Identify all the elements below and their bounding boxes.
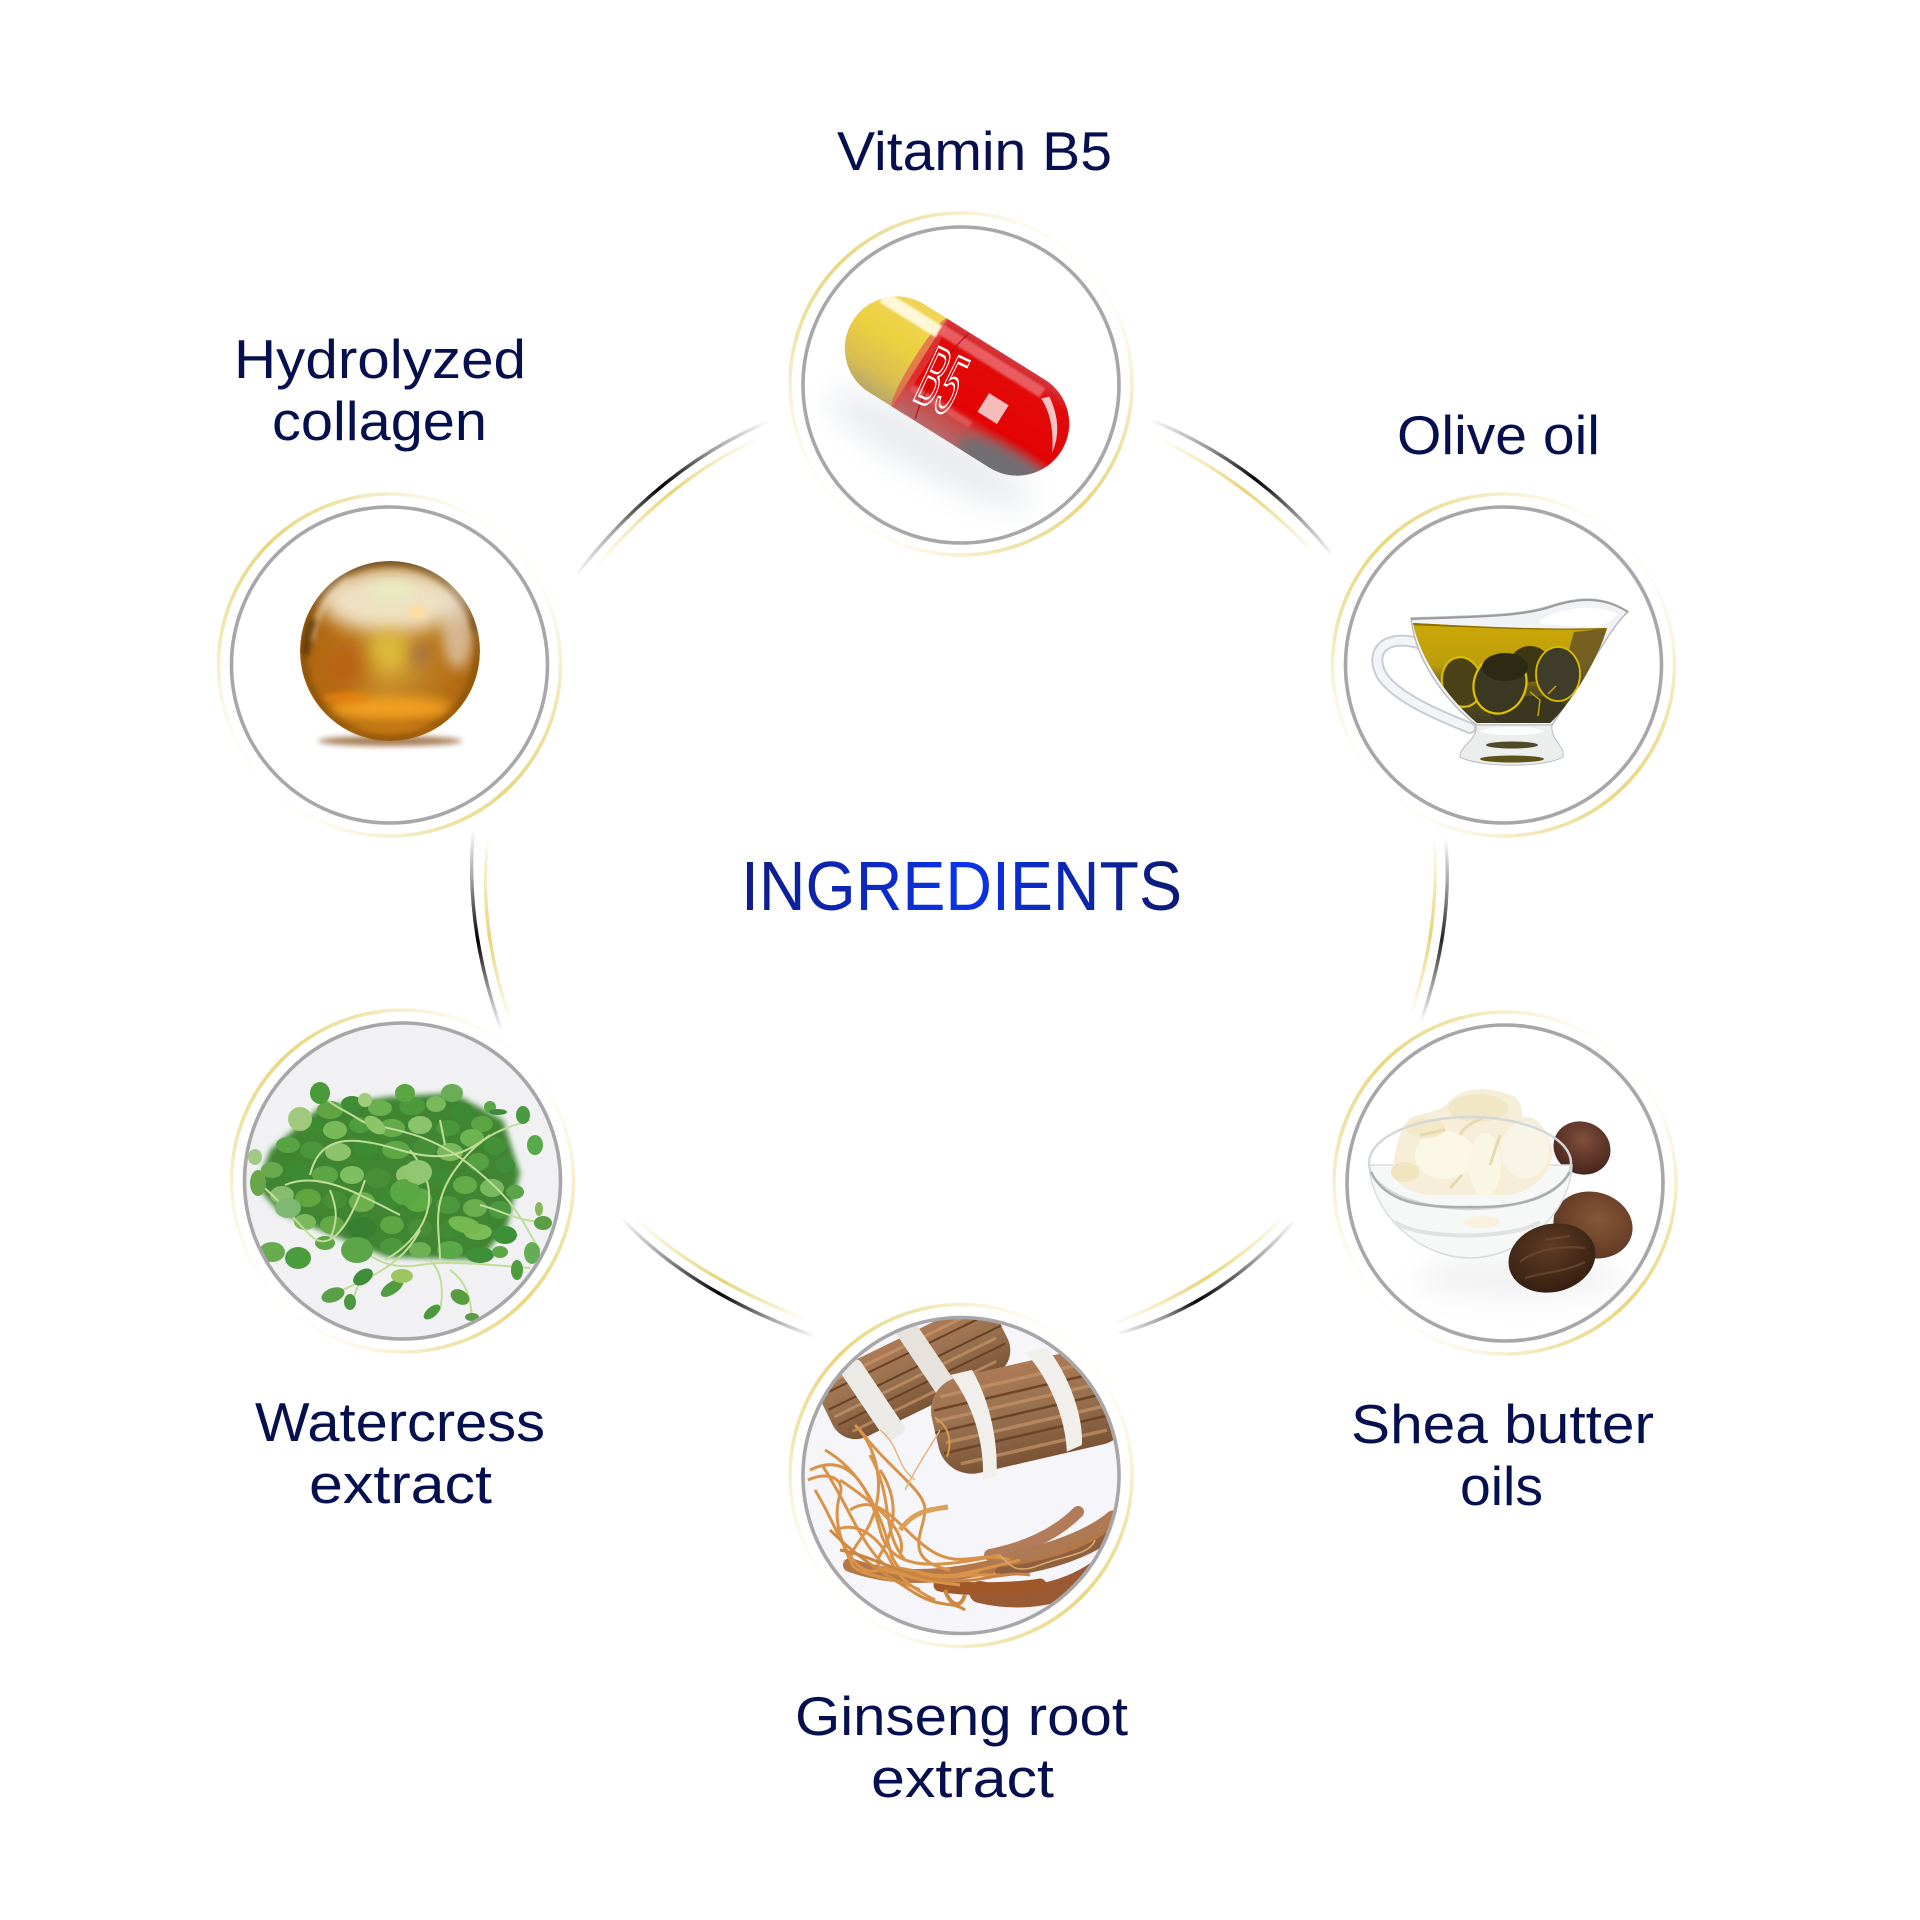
- icon: glass handle: [1377, 641, 1470, 728]
- icon: capsule: [844, 296, 1070, 476]
- bundle top left: [822, 1319, 1010, 1441]
- watercress background: [246, 1024, 560, 1338]
- outer and highlight leaves: [248, 1082, 552, 1322]
- label: Ginseng root extract: Ginseng root: [795, 1685, 1128, 1747]
- central heading: INGREDIENTS: INGREDIENTS: [741, 847, 1182, 925]
- connecting arc: left: [472, 815, 514, 1040]
- ground shadow: [1415, 1260, 1625, 1296]
- label: Shea butter oils: [1351, 1393, 1654, 1517]
- label: Shea butter oils: oils: [1460, 1455, 1543, 1517]
- icon: right nut: [1546, 1183, 1640, 1267]
- ingredient circle: Hydrolyzed collagen sphere: [218, 494, 560, 836]
- label: Watercress extract: Watercress: [255, 1391, 545, 1453]
- label: Hydrolyzed collagen: Hydrolyzed: [234, 328, 526, 390]
- bundle right: [931, 1348, 1114, 1479]
- main root: [850, 1512, 1122, 1596]
- sphere shadow: [318, 736, 462, 746]
- watercress ring: [244, 1023, 560, 1339]
- ginseng background: [804, 1318, 1118, 1632]
- icon: watercress leaves: [248, 1082, 552, 1322]
- icon text: B5 on capsule: B5: [903, 328, 980, 433]
- label: Shea butter oils: Shea butter: [1351, 1393, 1654, 1455]
- label: Watercress extract: [255, 1391, 545, 1515]
- connecting arc: top left: [565, 415, 785, 590]
- icon: ginseng roots: [807, 1319, 1114, 1612]
- icon: shea butter: [1391, 1089, 1553, 1197]
- label: Watercress extract: extract: [309, 1453, 492, 1515]
- icon: golden sphere: [300, 561, 480, 741]
- fine rootlets: [808, 1425, 1095, 1610]
- label: Ginseng root extract: extract: [871, 1747, 1054, 1809]
- ingredient circle: Olive oil gravy boat: [1332, 494, 1674, 836]
- connecting arc: right: [1408, 825, 1447, 1030]
- stems: [258, 1093, 540, 1317]
- label: Ginseng root extract: [795, 1685, 1128, 1809]
- dense leaf layer: [261, 1096, 524, 1263]
- icon: back nut: [1545, 1112, 1619, 1184]
- ingredient circle: Vitamin B5 capsule: [790, 213, 1132, 555]
- ingredient circle: Ginseng root: [790, 1283, 1138, 1646]
- icon: glass bowl: [1369, 1165, 1572, 1258]
- ingredient circle: Watercress: [232, 1010, 574, 1352]
- icon: glass foot: [1460, 725, 1563, 765]
- connecting arc: bottom right: [1095, 1202, 1305, 1338]
- label: Olive oil: Olive oil: [1397, 404, 1600, 466]
- connecting arc: bottom left: [610, 1205, 825, 1340]
- label: Hydrolyzed collagen: collagen: [272, 390, 487, 452]
- ingredient circle: Shea butter: [1334, 1012, 1676, 1354]
- label: Hydrolyzed collagen: [234, 328, 526, 452]
- icon: oil and olives: [1413, 623, 1607, 723]
- capsule shadow: [816, 373, 1044, 527]
- connecting arc: top right: [1130, 412, 1340, 565]
- ginseng ring: [803, 1318, 1119, 1634]
- label: Vitamin B5: Vitamin B5: [837, 120, 1112, 182]
- icon: glass boat outline: [1411, 599, 1628, 725]
- icon: bowl rim: [1369, 1117, 1571, 1236]
- icon: front nut: [1501, 1214, 1603, 1302]
